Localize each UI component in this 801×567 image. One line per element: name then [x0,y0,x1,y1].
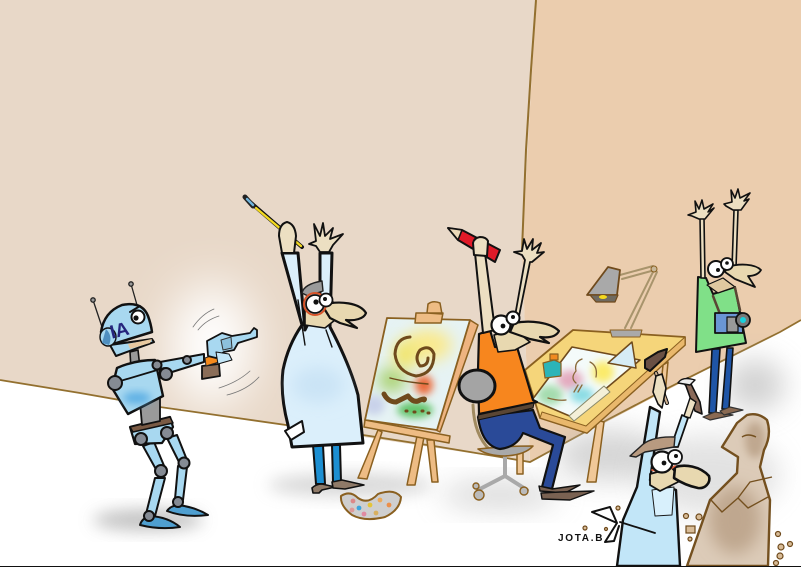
draftsman shoes [539,485,594,500]
draftsman shoulder [459,370,495,402]
office chair [473,405,533,500]
motion lines [193,309,259,395]
robot arm [160,354,204,378]
photographer legs [709,348,733,413]
painter legs [313,445,341,484]
painter in white coat [245,197,366,493]
easel with abstract canvas [341,302,478,519]
photographer shirt [696,277,746,352]
robot head [100,304,154,356]
drawing paper [532,347,640,417]
table top [525,330,685,433]
draftsman in orange shirt [448,228,594,500]
painter head [302,281,366,328]
robot neck [130,350,140,369]
photographer head [707,258,761,293]
drafting table and lamp [517,266,685,482]
sculptor with hammer and chisel [592,349,709,566]
canvas spiral [395,337,434,376]
robot with IA label pointing a revolver [91,282,259,528]
robot antennas [91,282,137,327]
sculptor hammer [645,349,667,408]
painter hand with brush [245,197,302,253]
easel clamp [415,302,443,323]
ruler [569,386,610,421]
palette [341,492,401,519]
draftsman head [492,312,559,352]
photographer shoes [703,407,743,420]
canvas painting [366,319,469,429]
canvas edge [436,320,478,432]
ink bottle [543,354,561,378]
artist signature: JOTA.B [558,533,604,544]
bottom border line [0,566,801,567]
table legs [517,362,668,482]
robot torso [112,360,163,414]
draftsman trousers [478,410,565,489]
lamp [587,266,657,337]
floor shadows [93,359,785,531]
set square [608,342,636,368]
draftsman open hand [514,239,544,316]
sculptor head [650,450,709,491]
painter open hand [309,223,343,252]
camera [713,288,750,333]
photographer with camera [688,189,761,420]
sculptor body and apron [617,407,680,566]
draftsman raised arm and pencil [448,228,500,333]
draftsman shirt [478,330,537,414]
photographer arms and hands [688,189,750,278]
stone chips [583,506,792,566]
robot hand and revolver [193,309,259,395]
canvas squiggle [384,394,424,402]
robot legs [140,435,208,528]
stone statue [686,413,772,566]
easel shelf [364,420,450,443]
robot head: IA [108,319,132,344]
painter shoes [312,480,364,493]
apron bow [592,507,619,542]
sculptor chisel [678,378,702,418]
robot pelvis [130,417,173,444]
painter coat [282,253,363,447]
robot waist [140,398,160,425]
easel legs [358,430,438,485]
paper sketch [548,359,596,400]
sculptor hat [630,437,675,457]
